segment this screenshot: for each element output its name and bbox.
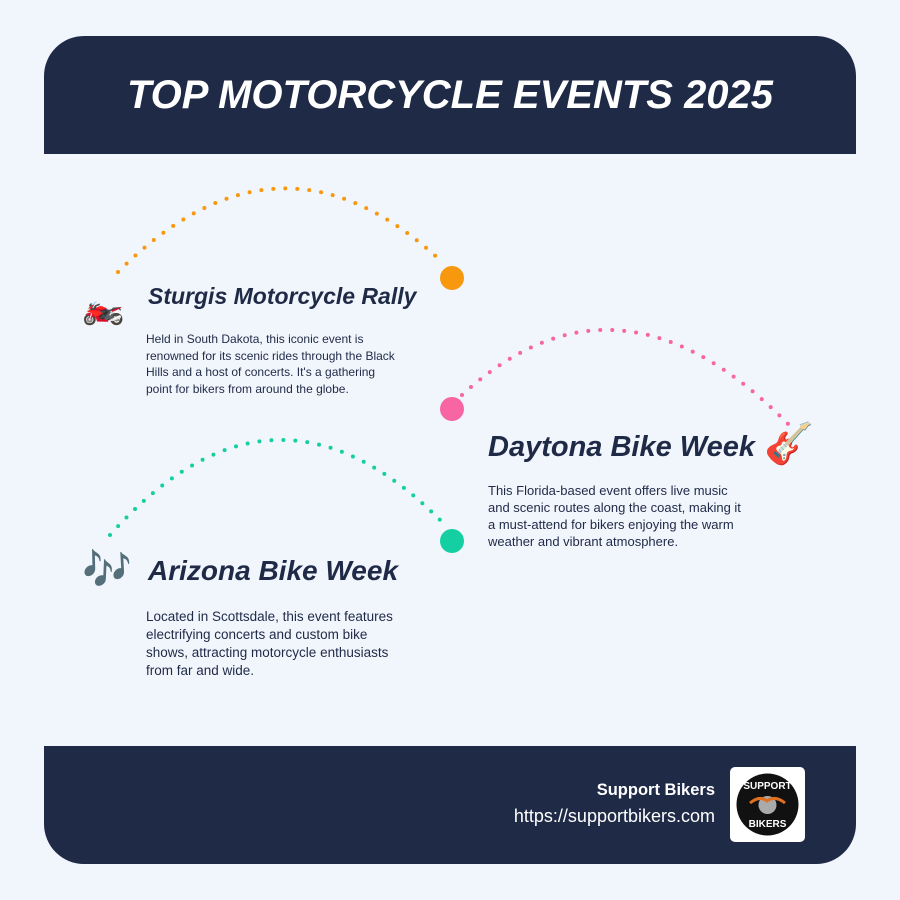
- icon: motorcycle: 🏍️: [82, 288, 124, 326]
- brand name: Support Bikers: [597, 781, 715, 799]
- text: arizona: from far and wide.: [146, 663, 254, 678]
- text: arizona: Located in Scottsdale, this event features: [146, 609, 393, 624]
- arc: arizona: [110, 440, 464, 553]
- text: daytona: and scenic routes along the coast, making it: [488, 500, 741, 515]
- text: arizona: electrifying concerts and custom bike: [146, 627, 367, 642]
- heading: arizona: Arizona Bike Week: [148, 555, 398, 586]
- icon: guitar: 🎸: [764, 422, 814, 466]
- arc: sturgis: [118, 188, 464, 290]
- text: arizona: [146, 609, 393, 678]
- text: sturgis: Hills and a host of concerts. It's a gathering: [146, 365, 375, 379]
- text: daytona: This Florida-based event offers live music: [488, 483, 728, 498]
- text: arizona: shows, attracting motorcycle enthusiasts: [146, 645, 388, 660]
- logo: [730, 767, 805, 842]
- logo: SUPPORT: [743, 781, 792, 792]
- heading: daytona: Daytona Bike Week: [488, 431, 755, 463]
- text: sturgis: [146, 332, 395, 396]
- text: daytona: weather and vibrant atmosphere.: [488, 534, 678, 549]
- text: daytona: a must-attend for bikers enjoying the warm: [488, 517, 734, 532]
- text: sturgis: renowned for its scenic rides through the Black: [146, 348, 395, 362]
- url: https://supportbikers.com: [514, 806, 715, 826]
- text: sturgis: point for bikers from around the globe.: [146, 382, 349, 396]
- arc: daytona: [440, 330, 792, 428]
- title: TOP MOTORCYCLE EVENTS 2025: [127, 73, 773, 117]
- heading: sturgis: Sturgis Motorcycle Rally: [148, 283, 416, 309]
- text: sturgis: Held in South Dakota, this iconic event is: [146, 332, 363, 346]
- logo: BIKERS: [749, 819, 787, 830]
- icon: music notes: 🎶: [82, 548, 132, 592]
- header banner: [44, 36, 856, 154]
- footer: [44, 746, 856, 864]
- text: daytona: [488, 483, 741, 549]
